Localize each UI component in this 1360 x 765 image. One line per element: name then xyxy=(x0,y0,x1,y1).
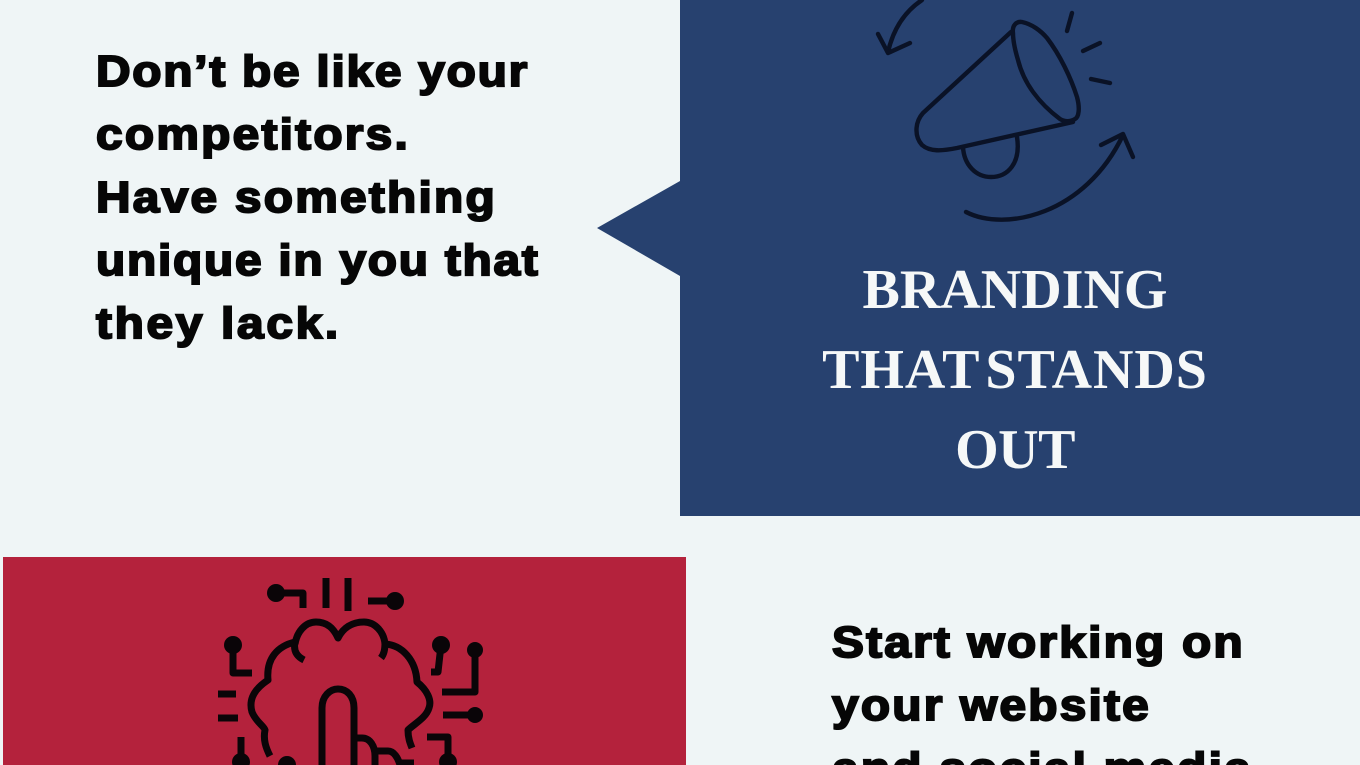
text block: competitors advice: Don’t be like your xyxy=(96,47,529,96)
text block: website and social media: your website xyxy=(832,681,1151,730)
heading: branding that stands out: BRANDING xyxy=(863,259,1167,321)
icon: megaphone with arrows xyxy=(876,0,1136,222)
text block: website and social media xyxy=(830,618,1253,765)
text block: competitors advice: Have something xyxy=(96,173,497,222)
panel: branding that stands out xyxy=(597,0,1360,516)
text block: competitors advice: unique in you that xyxy=(96,236,540,285)
text block: competitors advice: competitors. xyxy=(96,110,410,159)
heading: branding that stands out: OUT xyxy=(955,419,1075,481)
text block: website and social media: Start working on xyxy=(832,618,1245,667)
panel: red brain panel xyxy=(3,557,686,765)
heading: branding that stands out xyxy=(822,259,1208,481)
text block: competitors advice: they lack. xyxy=(96,299,341,348)
heading: branding that stands out: THAT STANDS xyxy=(822,339,1208,401)
text block: competitors advice xyxy=(96,47,540,348)
panel background with pointer xyxy=(597,0,1360,516)
